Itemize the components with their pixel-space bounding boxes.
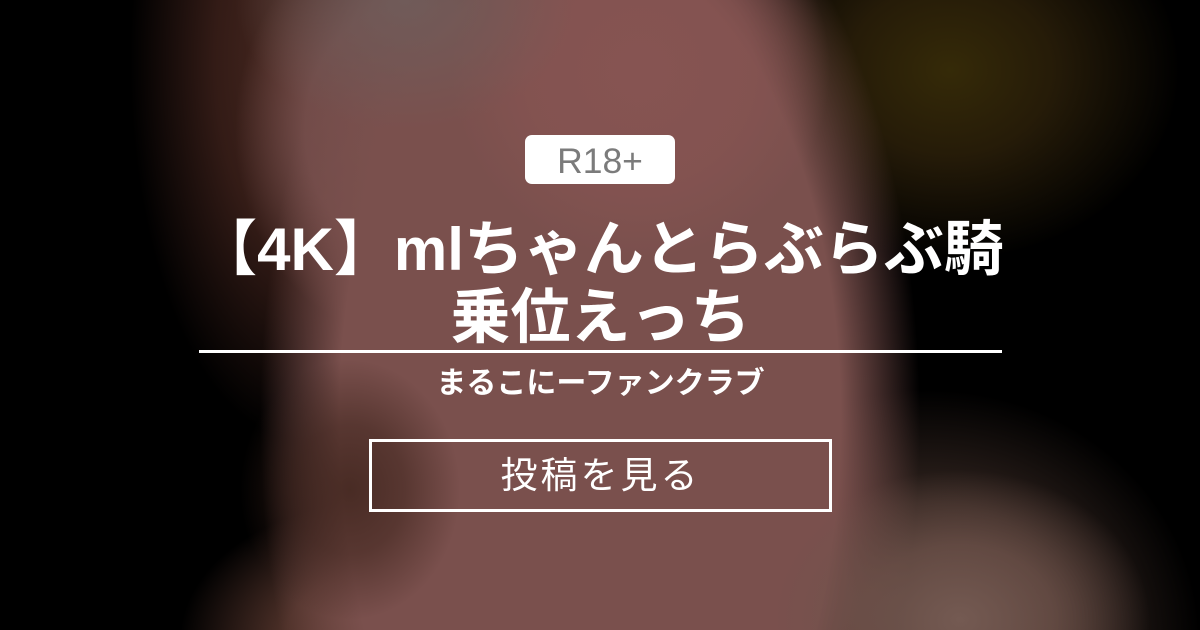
fan club name: まるこにーファンクラブ [436, 367, 765, 400]
title: 【4K】mlちゃんとらぶらぶ騎 [197, 216, 1004, 283]
button: view post: 投稿を見る [500, 455, 700, 496]
badge: R18+: R18+ [557, 141, 643, 181]
badge: R18+ [525, 135, 675, 184]
button: view post [369, 439, 832, 512]
title: 乗位えっち [450, 284, 750, 351]
divider under title [199, 350, 1002, 353]
title [197, 216, 1004, 351]
